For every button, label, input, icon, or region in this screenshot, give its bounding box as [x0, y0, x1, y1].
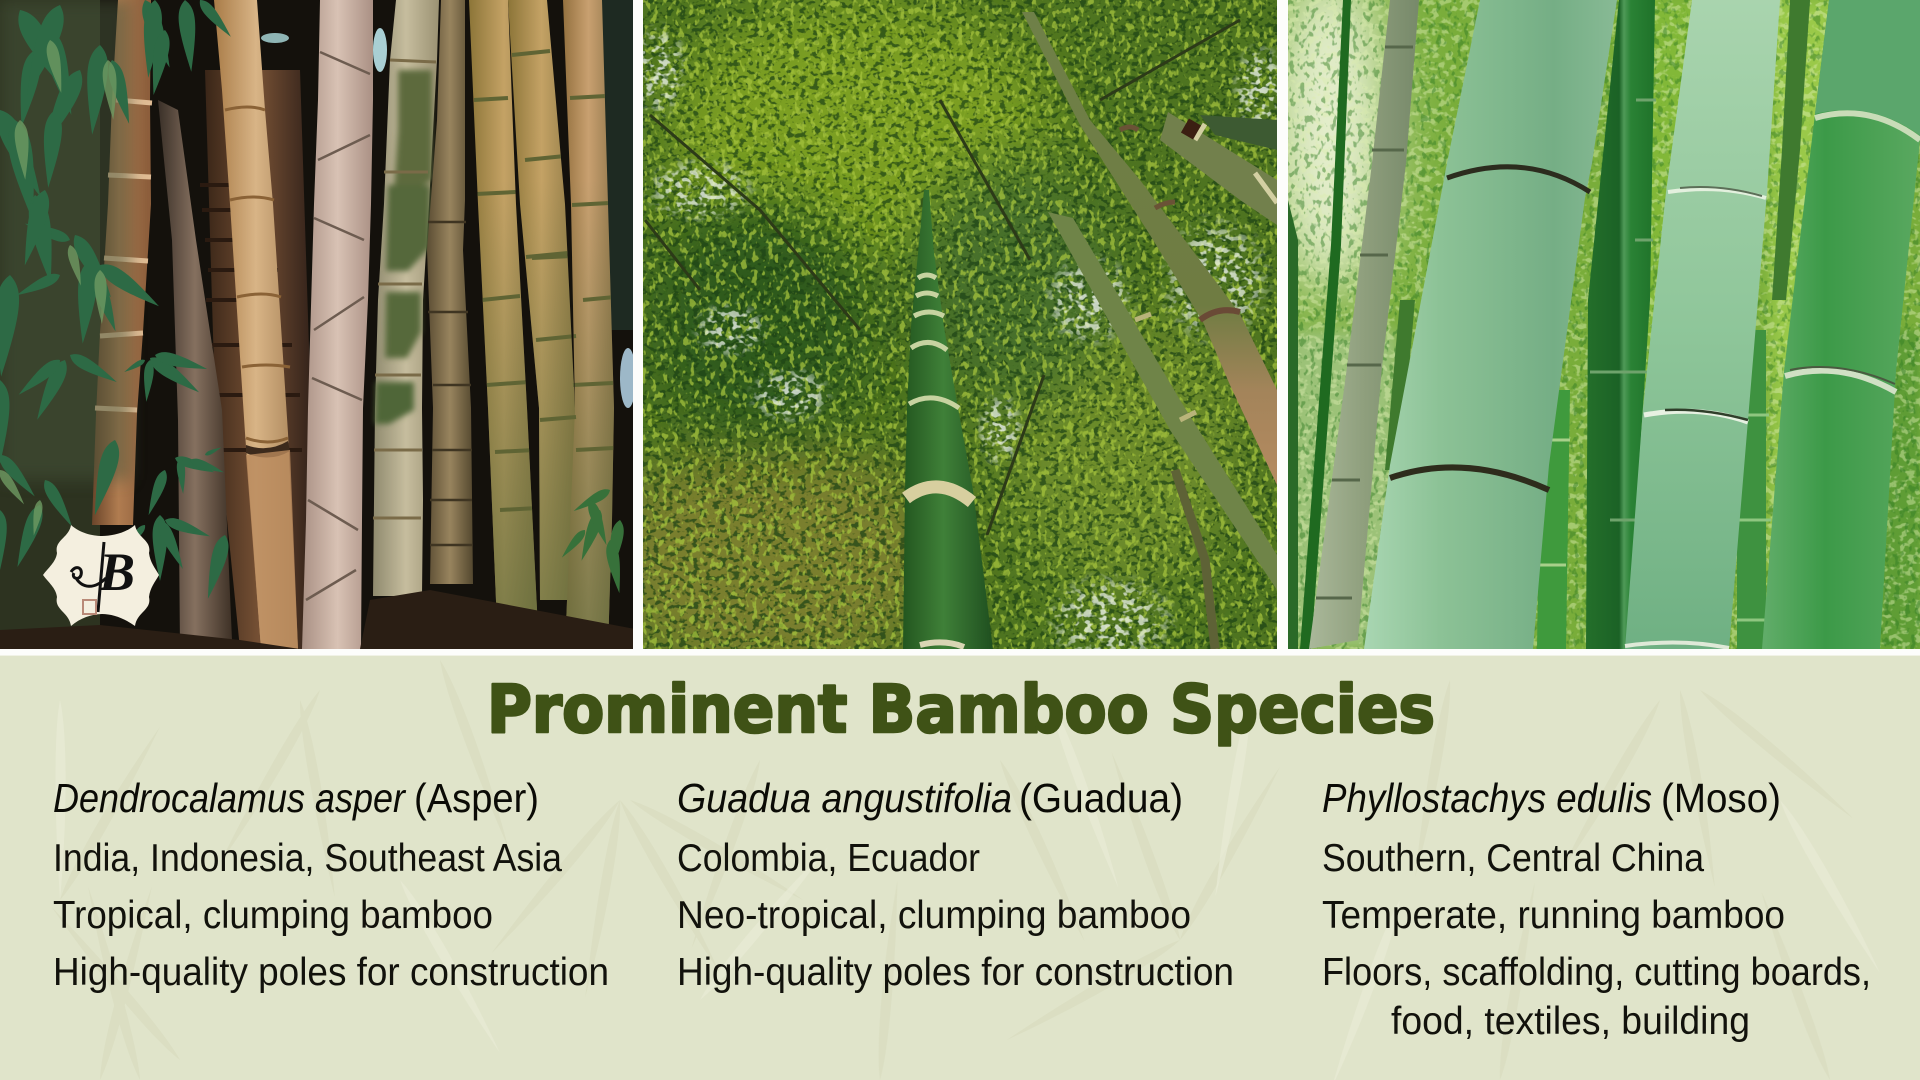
type: Temperate, running bamboo — [1322, 894, 1785, 937]
thin branches — [645, 20, 1240, 535]
small grass clump — [562, 489, 624, 593]
region: India, Indonesia, Southeast Asia — [53, 837, 562, 880]
stalk: central culm rising — [903, 190, 993, 649]
stalk: big left culm — [1364, 0, 1617, 649]
species heading: Dendrocalamus asper — [53, 775, 407, 821]
stalk: top right culm — [1160, 112, 1277, 225]
stalk: golden culm I — [563, 0, 614, 649]
stalk: centre right culm — [1625, 0, 1780, 649]
stalk: right culm, thin — [1048, 212, 1277, 590]
uses: High-quality poles for construction — [677, 951, 1234, 994]
foliage texture — [643, 0, 1277, 649]
stalk: grey sheath culm — [158, 100, 232, 649]
uses: food, textiles, building — [1391, 1000, 1750, 1043]
region: Southern, Central China — [1322, 837, 1704, 880]
uses — [1322, 951, 1871, 1043]
stalk: ochre culm — [214, 0, 298, 649]
stalk: olive culm — [427, 0, 473, 584]
species heading: (Guadua) — [1019, 775, 1183, 821]
uses: Floors, scaffolding, cutting boards, — [1322, 951, 1871, 994]
text panel background — [0, 649, 1920, 1080]
photo: Phyllostachys edulis culms — [1270, 0, 1920, 649]
logo badge: B — [98, 542, 135, 602]
stalk: golden culm H — [508, 0, 575, 600]
species heading: Phyllostachys edulis — [1322, 775, 1652, 821]
column: Dendrocalamus asper — [53, 775, 609, 994]
photo: Guadua angustifolia canopy — [643, 0, 1277, 649]
lower olive shading on the golden culms — [481, 230, 614, 624]
stalk: pink sheath culm — [302, 0, 373, 649]
stalk: middle dark green culms — [1586, 0, 1655, 649]
stalk: right culm, thick — [1022, 12, 1277, 485]
species heading: Guadua angustifolia — [677, 775, 1012, 821]
bokeh texture — [1288, 0, 1920, 649]
background thin culms — [1300, 0, 1351, 649]
sky gaps — [630, 0, 1290, 670]
uses: High-quality poles for construction — [53, 951, 609, 994]
type: Neo-tropical, clumping bamboo — [677, 894, 1191, 937]
type: Tropical, clumping bamboo — [53, 894, 493, 937]
species heading: (Moso) — [1661, 775, 1781, 821]
forest floor — [0, 590, 640, 649]
column: Guadua angustifolia — [677, 775, 1234, 994]
stalk: green-blotched culm — [373, 0, 439, 596]
column: Phyllostachys edulis — [1322, 775, 1871, 1043]
species heading: (Asper) — [414, 775, 539, 821]
logo badge — [43, 525, 159, 626]
region: Colombia, Ecuador — [677, 837, 980, 880]
title: Prominent Bamboo Species — [487, 671, 1435, 748]
stalk: golden culm G — [469, 0, 539, 649]
stalk: dark ribbed culm — [205, 70, 312, 649]
stalk: far right culm — [1762, 0, 1920, 649]
stalk: brown culm — [92, 0, 151, 525]
bamboo leaves cluster — [0, 0, 235, 601]
photo: Dendrocalamus asper stalks — [0, 0, 640, 649]
